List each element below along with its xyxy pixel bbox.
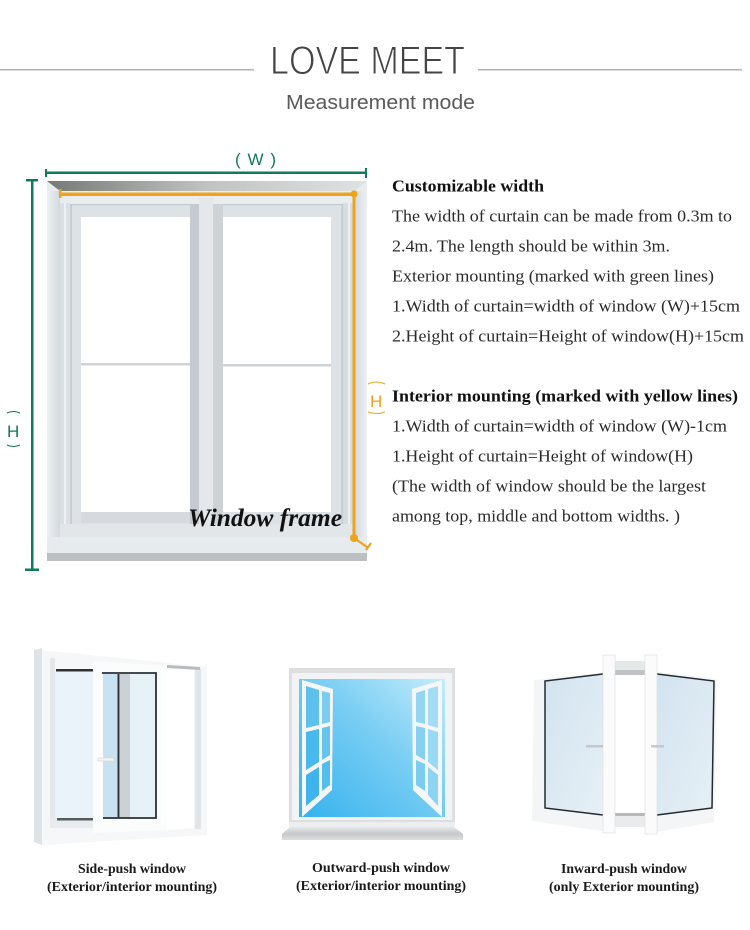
width label: ( W ) <box>235 150 276 169</box>
outward-push caption <box>296 860 466 893</box>
yellow height label <box>368 382 385 414</box>
yellow height label: H <box>370 392 382 411</box>
side-push caption: Side-push window <box>78 861 186 876</box>
side-push window <box>34 648 217 894</box>
subtitle: Measurement mode <box>286 92 475 114</box>
instructions: customizable width: 2.Height of curtain=Height of window(H)+15cm <box>392 327 744 346</box>
inward-push caption <box>549 861 699 894</box>
instructions: customizable width: 1.Width of curtain=width of window (W)+15cm <box>392 297 740 316</box>
instructions: interior mounting: 1.Height of curtain=Height of window(H) <box>392 447 693 466</box>
side-push window illustration <box>34 648 207 845</box>
window frame label: Window frame <box>188 505 342 532</box>
inward-push window <box>532 655 717 894</box>
outward-push window illustration <box>282 668 463 840</box>
side-push caption: (Exterior/interior mounting) <box>47 879 217 894</box>
outward-push window <box>282 668 466 893</box>
height label: H <box>7 422 19 441</box>
header divider right <box>478 69 742 70</box>
window sill <box>47 537 367 561</box>
instructions: interior mounting: 1.Width of curtain=width of window (W)-1cm <box>392 417 727 436</box>
instructions: interior mounting: among top, middle and bottom widths. ) <box>392 507 680 526</box>
yellow interior lines <box>59 189 371 550</box>
instructions: customizable width <box>392 177 744 346</box>
instructions: interior mounting <box>392 387 738 526</box>
height label <box>7 412 20 446</box>
instructions: customizable width: 2.4m. The length should be within 3m. <box>392 237 670 256</box>
outward-push caption: Outward-push window <box>312 860 450 875</box>
window outer frame <box>47 181 367 561</box>
instructions: customizable width: Customizable width <box>392 177 545 196</box>
instructions: customizable width: The width of curtain can be made from 0.3m to <box>392 207 732 226</box>
inward-push caption: (only Exterior mounting) <box>549 879 699 894</box>
window panes <box>81 198 331 524</box>
green width dimension <box>45 168 367 178</box>
instructions: interior mounting: Interior mounting (marked with yellow lines) <box>392 387 738 406</box>
main window diagram <box>7 150 385 571</box>
title: LOVE MEET <box>270 39 465 83</box>
side-push caption <box>47 861 217 894</box>
instructions: interior mounting: (The width of window should be the largest <box>392 477 706 496</box>
inward-push caption: Inward-push window <box>561 861 687 876</box>
header divider left <box>0 69 254 70</box>
green height dimension <box>25 179 39 571</box>
instructions: customizable width: Exterior mounting (marked with green lines) <box>392 267 714 286</box>
outward-push caption: (Exterior/interior mounting) <box>296 878 466 893</box>
inward-push window illustration <box>532 655 717 834</box>
